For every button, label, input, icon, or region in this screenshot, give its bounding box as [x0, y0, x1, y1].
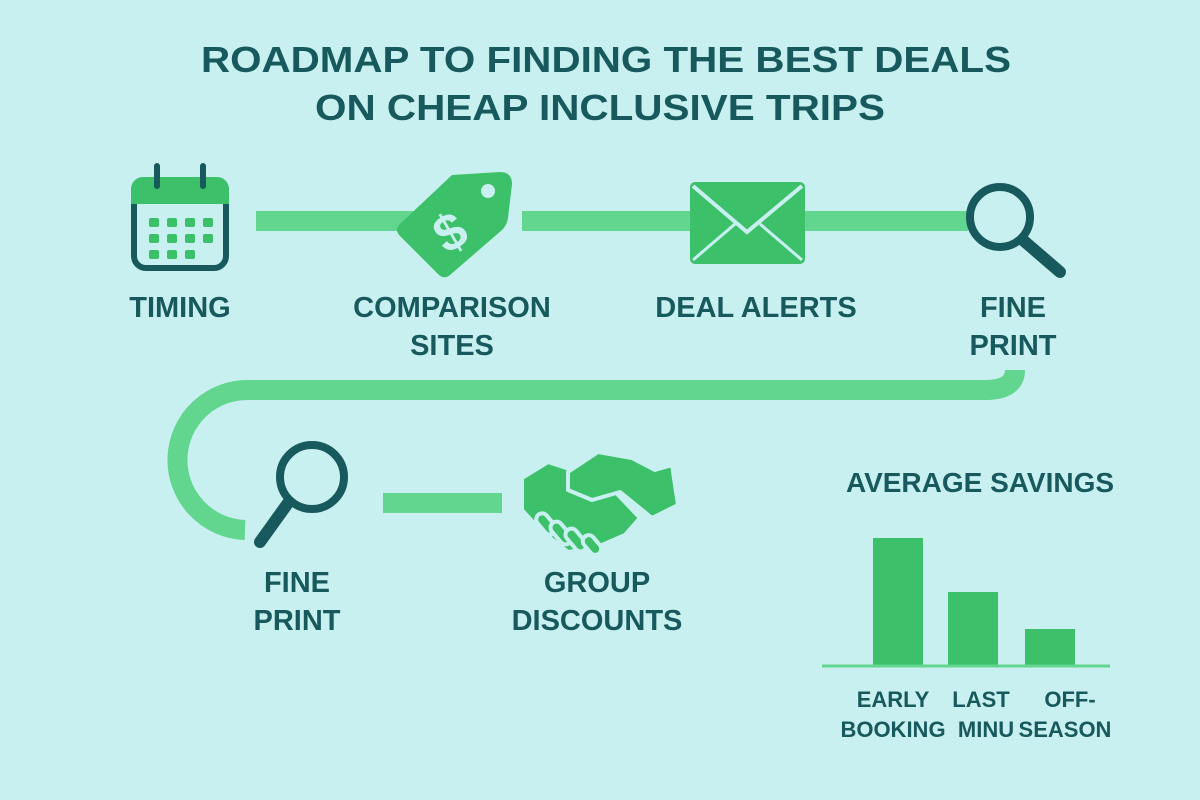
- labels row 2: FINE: [264, 567, 330, 599]
- roadmap path: [177, 221, 1015, 530]
- icon: handshake: [522, 452, 678, 557]
- chart: average savings: [822, 467, 1114, 742]
- chart: average savings: AVERAGE SAVINGS: [846, 467, 1114, 498]
- labels row 2: DISCOUNTS: [512, 605, 682, 637]
- labels row 1: SITES: [410, 330, 494, 362]
- icon: calendar: [131, 166, 229, 268]
- labels row 1: DEAL ALERTS: [655, 292, 857, 324]
- chart: average savings: BOOKING: [840, 717, 946, 742]
- labels row 1: [129, 292, 1057, 362]
- icon: magnifier 2: [260, 445, 344, 542]
- labels row 1: PRINT: [970, 330, 1057, 362]
- title: ROADMAP TO FINDING THE BEST DEALS: [201, 39, 1011, 80]
- chart: average savings: LAST: [952, 687, 1010, 712]
- labels row 1: COMPARISON: [353, 292, 551, 324]
- title: [201, 39, 1011, 128]
- icon: magnifier 1: [970, 187, 1060, 272]
- chart: average savings: OFF-: [1044, 687, 1096, 712]
- icon: envelope: [690, 182, 805, 264]
- labels row 1: FINE: [980, 292, 1046, 324]
- chart: average savings: SEASON: [1019, 717, 1111, 742]
- chart: average savings: MINU: [958, 717, 1014, 742]
- chart: average savings: EARLY: [857, 687, 930, 712]
- dollar sign: $: [423, 200, 478, 265]
- title: ON CHEAP INCLUSIVE TRIPS: [315, 87, 885, 128]
- labels row 1: TIMING: [129, 292, 231, 324]
- icon: price tag: [397, 172, 512, 277]
- labels row 2: GROUP: [544, 567, 650, 599]
- labels row 2: [254, 567, 682, 637]
- labels row 2: PRINT: [254, 605, 341, 637]
